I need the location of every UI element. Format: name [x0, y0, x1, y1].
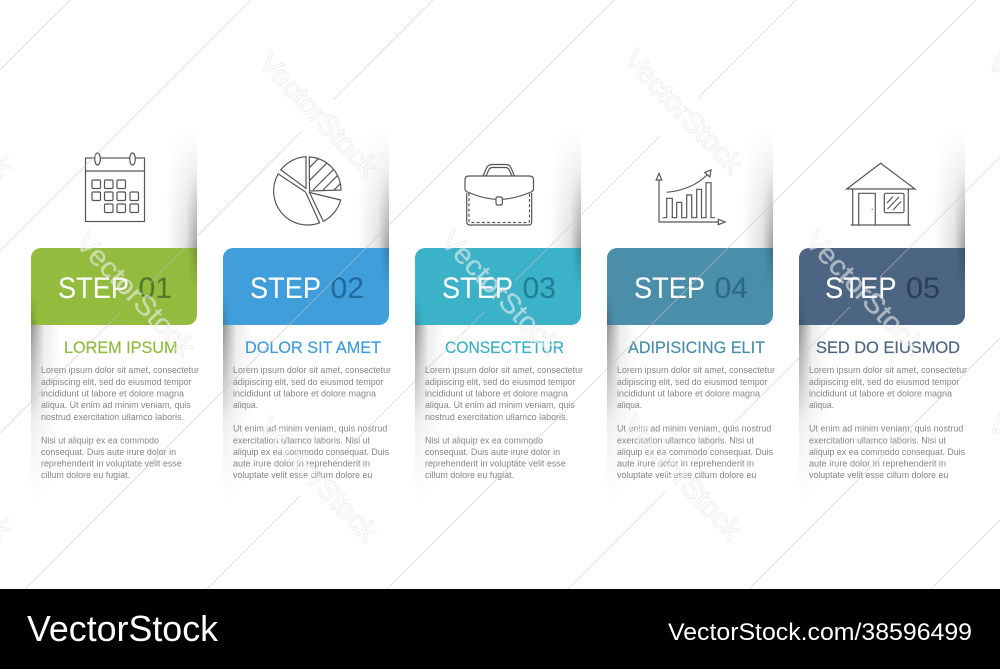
step 1 body text: nostrud exercitation ullamco laboris. — [41, 412, 184, 422]
step 5 body text: aliquip ex ea commodo consequat. Duis — [809, 447, 965, 457]
step 4 body text: aliquip ex ea commodo consequat. Duis — [617, 447, 773, 457]
step 4 body text: aliqua. — [617, 400, 642, 410]
watermarks — [0, 44, 1000, 548]
step 2 body text: incididunt ut labore et dolore magna — [233, 388, 377, 398]
step 4 top shadow — [747, 151, 773, 248]
step 3 heading: CONSECTETUR — [445, 339, 564, 357]
step 4 body text — [617, 365, 775, 480]
watermarks: VectorStock — [253, 412, 385, 548]
step 2 lower shadow — [223, 325, 246, 459]
step 3 body text: reprehenderit in voluptate velit esse — [425, 458, 566, 468]
step 2 banner — [223, 248, 389, 325]
step 2 body text — [233, 365, 391, 480]
step 3 top shadow — [555, 151, 581, 248]
icon: house — [847, 163, 915, 225]
step 2 body text: aliqua. — [233, 400, 258, 410]
step 4 body text: incididunt ut labore et dolore magna — [617, 388, 761, 398]
step 3 body text: adipiscing elit, sed do eiusmod tempor — [425, 377, 576, 387]
step 1 top shadow — [171, 151, 197, 248]
step 1 body text: reprehenderit in voluptate velit esse — [41, 458, 182, 468]
step 5 body text: incididunt ut labore et dolore magna — [809, 388, 953, 398]
step 4 banner: STEP — [634, 272, 705, 305]
step 2 heading: DOLOR SIT AMET — [245, 339, 381, 357]
step 4 column — [607, 151, 775, 480]
step 2 column — [223, 151, 391, 480]
step 3 body text: Nisi ut aliquip ex ea commodo — [425, 436, 543, 446]
step 2 body text: exercitation ullamco laboris. Nisi ut — [233, 436, 370, 446]
step 5 heading: SED DO EIUSMOD — [816, 339, 960, 357]
step 1 body text: cillum dolore eu fugiat. — [41, 470, 130, 480]
step 5 body text — [809, 365, 967, 480]
icon: growth chart — [656, 170, 725, 225]
step 5 body text: aliqua. — [809, 400, 834, 410]
step 3 banner — [415, 248, 581, 325]
step 4 body text: adipiscing elit, sed do eiusmod tempor — [617, 377, 768, 387]
step 3 body text: incididunt ut labore et dolore magna — [425, 388, 569, 398]
step 1 heading: LOREM IPSUM — [64, 339, 178, 357]
step 3 lower shadow — [415, 325, 438, 459]
icon: briefcase — [465, 164, 534, 225]
step 4 body text: exercitation ullamco laboris. Nisi ut — [617, 436, 754, 446]
step 5 body text: Lorem ipsum dolor sit amet, consectetur — [809, 365, 967, 375]
step 1 body text: Lorem ipsum dolor sit amet, consectetur — [41, 365, 199, 375]
step 3 body text: consequat. Duis aute irure dolor in — [425, 447, 560, 457]
watermarks: VectorStock — [435, 225, 567, 361]
step 5 banner — [799, 248, 965, 325]
step 3 body text: aliqua. Ut enim ad minim veniam, quis — [425, 400, 575, 410]
step 2 body text: aliquip ex ea commodo consequat. Duis — [233, 447, 389, 457]
icon: pie chart — [274, 155, 347, 225]
watermarks: VectorStock — [617, 410, 749, 546]
step 2 body text: Ut enim ad minim veniam, quis nostrud — [233, 424, 387, 434]
step 1 body text: Nisi ut aliquip ex ea commodo — [41, 436, 159, 446]
step 4 body text: Lorem ipsum dolor sit amet, consectetur — [617, 365, 775, 375]
watermarks: VectorStock — [618, 44, 750, 180]
step 1 body text: adipiscing elit, sed do eiusmod tempor — [41, 377, 192, 387]
step 4 body text: Ut enim ad minim veniam, quis nostrud — [617, 424, 771, 434]
step 2 body text: voluptate velit esse cillum dolore eu — [233, 470, 372, 480]
footer image id: VectorStock.com/38596499 — [668, 619, 972, 646]
step 4 banner — [607, 248, 773, 325]
step 2 body text: Lorem ipsum dolor sit amet, consectetur — [233, 365, 391, 375]
step 3 column — [415, 151, 583, 480]
step 5 column — [799, 151, 967, 480]
step 3 body text: nostrud exercitation ullamco laboris. — [425, 412, 568, 422]
footer brand: VectorStock — [27, 608, 219, 649]
step 4 heading: ADIPISICING ELIT — [628, 339, 765, 357]
step 5 lower shadow — [799, 325, 822, 459]
step 1 column — [31, 151, 199, 480]
step 2 body text: aute irure dolor in reprehenderit in — [233, 458, 370, 468]
step 3 body text: Lorem ipsum dolor sit amet, consectetur — [425, 365, 583, 375]
step 1 body text — [41, 365, 199, 480]
step 1 banner: STEP — [58, 272, 129, 305]
step 2 banner: STEP — [250, 272, 321, 305]
watermarks: VectorStock — [799, 225, 931, 361]
step 5 body text: voluptate velit esse cillum dolore eu — [809, 470, 948, 480]
step 2 banner: 02 — [330, 272, 364, 305]
step 4 banner: 04 — [714, 272, 748, 305]
step 4 body text: aute irure dolor in reprehenderit in — [617, 458, 754, 468]
step 4 body text: voluptate velit esse cillum dolore eu — [617, 470, 756, 480]
step 1 banner — [31, 248, 197, 325]
step 5 body text: aute irure dolor in reprehenderit in — [809, 458, 946, 468]
step 5 body text: adipiscing elit, sed do eiusmod tempor — [809, 377, 960, 387]
step 1 body text: incididunt ut labore et dolore magna — [41, 388, 185, 398]
step 3 banner: 03 — [522, 272, 556, 305]
footer bar — [0, 589, 1000, 669]
step 2 body text: adipiscing elit, sed do eiusmod tempor — [233, 377, 384, 387]
icon: calendar — [86, 153, 144, 222]
step 2 top shadow — [363, 151, 389, 248]
step 5 body text: Ut enim ad minim veniam, quis nostrud — [809, 424, 963, 434]
step 3 body text — [425, 365, 583, 480]
watermarks: VectorStock — [253, 47, 385, 183]
step 5 body text: exercitation ullamco laboris. Nisi ut — [809, 436, 946, 446]
step 1 body text: aliqua. Ut enim ad minim veniam, quis — [41, 400, 191, 410]
step 1 lower shadow — [31, 325, 54, 459]
step 3 body text: cillum dolore eu fugiat. — [425, 470, 514, 480]
watermarks: VectorStock — [70, 227, 202, 363]
step 5 banner: 05 — [906, 272, 940, 305]
step 3 banner: STEP — [442, 272, 513, 305]
step 5 banner: STEP — [825, 272, 896, 305]
step 5 top shadow — [939, 151, 965, 248]
step 1 banner: 01 — [138, 272, 172, 305]
step 1 body text: consequat. Duis aute irure dolor in — [41, 447, 176, 457]
step 4 lower shadow — [607, 325, 630, 459]
